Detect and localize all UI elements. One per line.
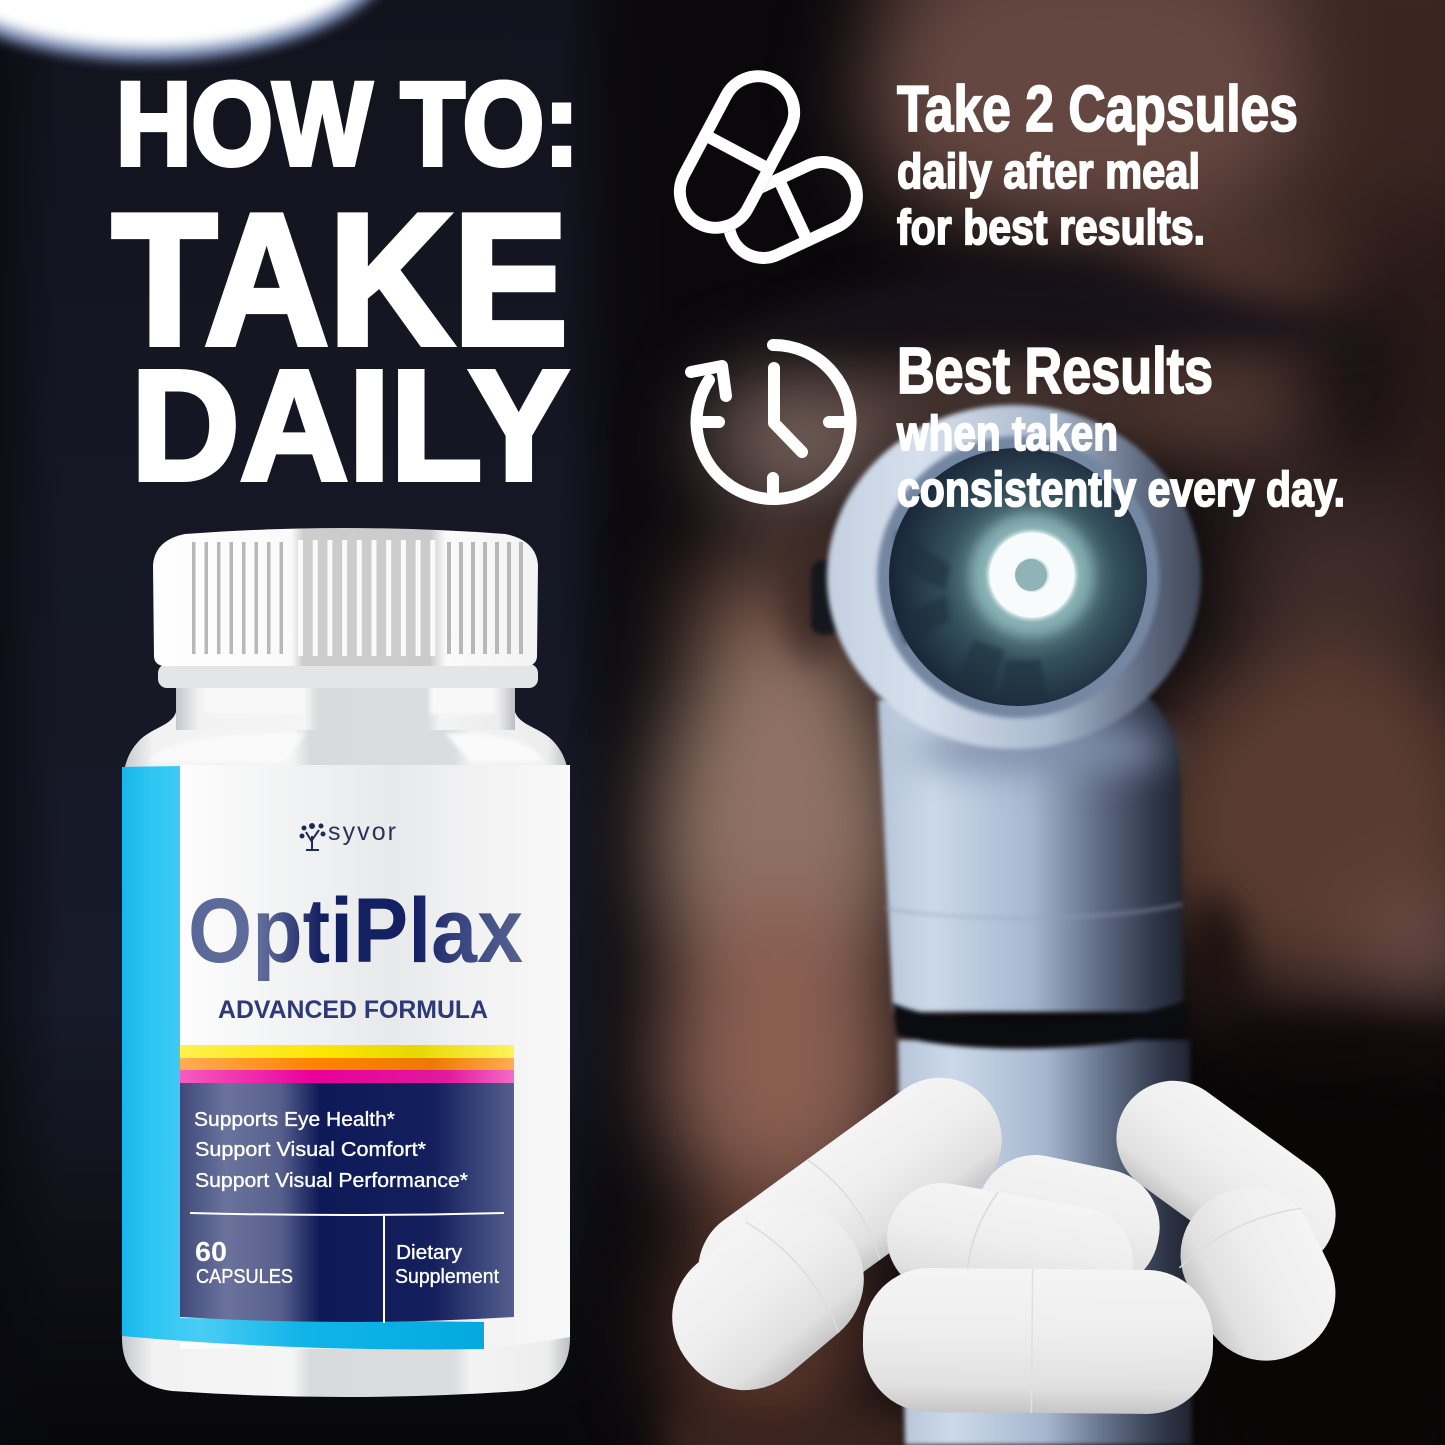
colour stripes (180, 1045, 514, 1083)
results line 1: when taken (896, 407, 1118, 461)
navy info panel: Supplement (395, 1266, 499, 1288)
heading line: daily: DAILY (131, 338, 569, 514)
instruction line 2: for best results. (897, 201, 1205, 255)
dietary supplement note: Dietary (396, 1242, 462, 1264)
label white area (180, 765, 570, 1349)
product name: OptiPlax (188, 880, 523, 982)
top light flare (0, 0, 396, 61)
text block: take 2 capsules (897, 72, 1298, 255)
brand logo (300, 818, 396, 850)
bottle label (122, 765, 570, 1349)
instruction heading: Take 2 Capsules (897, 72, 1298, 145)
capsule: upper right (1094, 1058, 1358, 1294)
label blue band (122, 766, 484, 1349)
neck highlights (150, 680, 545, 762)
bottle cap (153, 528, 538, 666)
lens (889, 448, 1147, 706)
navy info panel: Support Visual Comfort* (195, 1139, 426, 1161)
otoscope handle (878, 690, 1192, 1445)
icon: two capsules (674, 70, 863, 264)
text block: best results (896, 334, 1345, 517)
neck ring (158, 664, 538, 688)
instruction line 1: daily after meal (897, 145, 1200, 199)
benefit lines: Supports Eye Health* (194, 1109, 395, 1131)
navy info panel: Support Visual Performance* (195, 1170, 468, 1192)
formula subtitle: ADVANCED FORMULA (218, 996, 488, 1024)
heading line: take: TAKE (112, 175, 568, 384)
navy info panel (180, 1083, 514, 1323)
capsule: middle back (966, 1144, 1170, 1300)
tree mark (300, 824, 325, 850)
otoscope head (827, 405, 1201, 749)
white capsules pile (644, 1053, 1358, 1419)
heading line: how to: HOW TO: (116, 58, 579, 190)
neck shadow (910, 728, 1170, 772)
brand name: syvor (328, 818, 396, 846)
bottle body (122, 712, 570, 1397)
results line 2: consistently every day. (897, 463, 1345, 517)
capsule: front large (862, 1267, 1214, 1415)
otoscope instrument (811, 405, 1201, 1445)
otoscope side knob (811, 560, 839, 635)
panel dividers (190, 1213, 504, 1323)
capsule: middle front (878, 1174, 1142, 1326)
bottle neck (176, 680, 515, 730)
lens rim (877, 436, 1159, 718)
capsule: lower left (644, 1177, 892, 1419)
icon: clock with refresh arrow (691, 345, 851, 499)
capsule count: 60 (195, 1236, 227, 1267)
supplement bottle (122, 528, 570, 1397)
heading: how to take daily (112, 58, 579, 514)
results heading: Best Results (897, 334, 1213, 407)
cap ridges (192, 542, 290, 654)
capsule: lower right (1158, 1165, 1358, 1383)
capsule: upper left (674, 1053, 1026, 1357)
light glow (970, 513, 1094, 637)
navy info panel: CAPSULES (196, 1266, 293, 1288)
